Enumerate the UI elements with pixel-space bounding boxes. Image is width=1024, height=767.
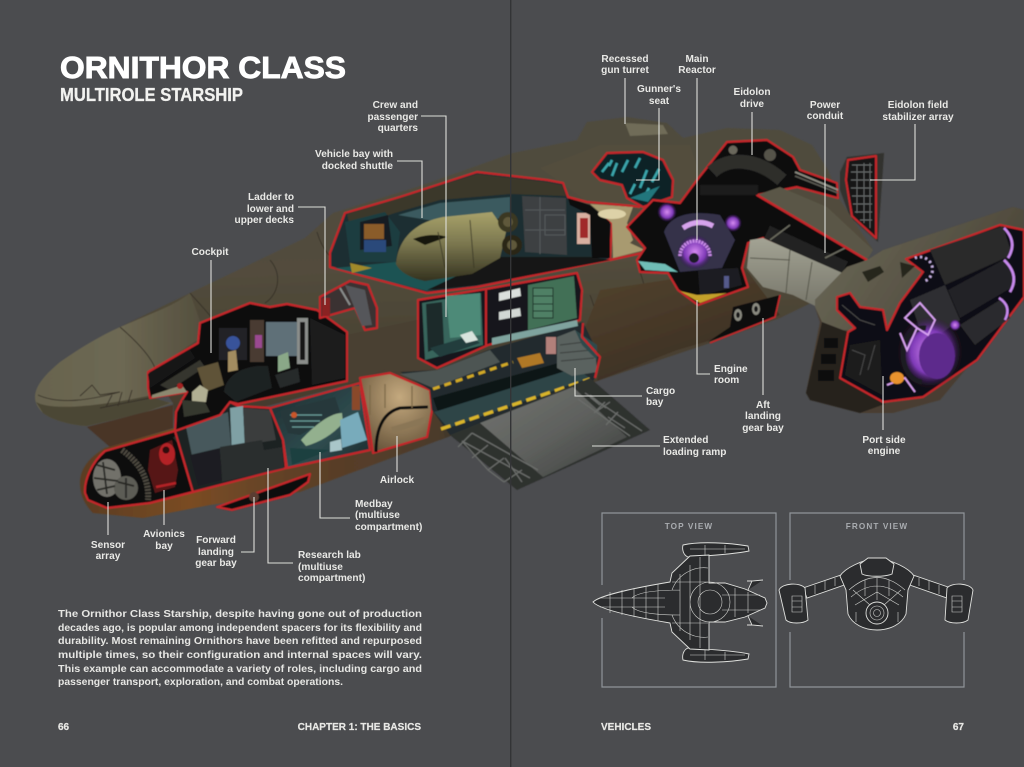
- panel: front view blueprint: [779, 513, 973, 687]
- ring of lights: [915, 257, 933, 281]
- ladder compartment: [320, 281, 377, 330]
- red corridor cut: [568, 197, 640, 207]
- top spine plate: [540, 145, 700, 210]
- label: sensor array: Sensor: [91, 540, 125, 551]
- label: ladder: upper decks: [235, 215, 294, 226]
- neck under nose: [87, 405, 173, 447]
- label: eidolon drive: drive: [740, 99, 764, 110]
- compartment: airlock: [360, 373, 432, 453]
- avionics red unit: [148, 440, 178, 493]
- label: forward landing gear bay: gear bay: [195, 558, 237, 569]
- pale belly stripe: [673, 306, 717, 348]
- label: vehicle bay: Vehicle bay with: [315, 149, 393, 160]
- top view ship drawing: [593, 543, 767, 662]
- label: medbay: (multiuse: [355, 510, 400, 521]
- docked shuttle: [396, 212, 522, 281]
- belly aft: [583, 268, 780, 381]
- heading: TOP VIEW: [665, 522, 713, 531]
- description paragraph: durability. Most remaining Ornithors have been refitted and repurposed: [58, 635, 422, 647]
- front view ship drawing: [779, 558, 973, 630]
- compartment: engine room with main reactor: [627, 140, 867, 305]
- purple engine disc: [898, 316, 962, 388]
- fin dark panel: [806, 322, 885, 413]
- label: cargo bay: bay: [646, 397, 664, 408]
- compartment: medbay: [270, 383, 370, 468]
- label: research lab: Research lab: [298, 550, 361, 561]
- callout labels: [91, 54, 954, 584]
- label: forward landing gear bay: Forward: [196, 535, 236, 546]
- rear floor: [427, 257, 610, 290]
- description paragraph: This example can accommodate a variety of roles, including cargo and: [58, 663, 422, 675]
- cargo bay: [400, 322, 600, 435]
- label: avionics bay: bay: [155, 541, 173, 552]
- label: forward landing gear bay: landing: [198, 547, 234, 558]
- description paragraph: The Ornithor Class Starship, despite having gone out of production: [58, 608, 422, 620]
- heading: FRONT VIEW: [846, 522, 908, 531]
- outer shell: [806, 207, 1024, 413]
- label: engine room: room: [714, 375, 739, 386]
- label: port side engine: Port side: [862, 435, 906, 446]
- label: port side engine: engine: [868, 446, 901, 457]
- compartment: research lab: [175, 402, 286, 492]
- back door panel: [557, 330, 597, 376]
- black floor channel: [433, 362, 575, 412]
- label: avionics bay: Avionics: [143, 529, 185, 540]
- stabilizer fin: [840, 153, 884, 242]
- turret highlight: [625, 123, 668, 136]
- label: ladder: lower and: [247, 204, 294, 215]
- footer: chapter title: CHAPTER 1: THE BASICS: [298, 722, 421, 733]
- label: research lab: (multiuse: [298, 562, 343, 573]
- compartment: vehicle bay: [330, 172, 647, 293]
- panel: top view blueprint: [593, 513, 776, 687]
- center spine fold: [510, 0, 511, 767]
- description paragraph: [58, 608, 422, 688]
- label: main reactor: Main: [686, 54, 708, 65]
- compartment: sensor array: [85, 431, 193, 508]
- wing plate over engine room: [757, 187, 873, 260]
- footer: section title: VEHICLES: [601, 722, 651, 733]
- title block: [60, 50, 346, 105]
- label: vehicle bay: docked shuttle: [322, 161, 393, 172]
- rear floor strip: [400, 350, 500, 388]
- lower pod hull: [80, 382, 445, 518]
- description paragraph: decades ago, is popular among independent spacers for its flexibility and: [58, 622, 422, 634]
- label: crew and passenger quarters: quarters: [378, 123, 418, 134]
- footer: right folio: 67: [953, 722, 964, 733]
- description paragraph: multiple times, so their configuration and internal spaces will vary.: [58, 649, 422, 661]
- power conduit tube: [747, 238, 847, 307]
- label: power conduit: Power: [810, 100, 840, 111]
- label: extended loading ramp: Extended: [663, 435, 708, 446]
- label: aft landing gear bay: landing: [745, 411, 781, 422]
- nose: [35, 293, 205, 426]
- subtitle: MULTIROLE STARSHIP: [60, 85, 243, 105]
- label: gunner's seat: seat: [649, 96, 670, 107]
- port side engine compartment: [837, 225, 1024, 402]
- label: extended loading ramp: loading ramp: [663, 447, 726, 458]
- roof band: [347, 174, 566, 228]
- orange thruster glow: [890, 372, 904, 384]
- label: aft landing gear bay: gear bay: [742, 423, 784, 434]
- compartment: gunner's seat turret: [592, 152, 673, 207]
- orange crate: [517, 353, 544, 368]
- compartment: cockpit: [148, 303, 347, 431]
- engine tubes: [930, 226, 1012, 285]
- bay back wall: [522, 196, 567, 255]
- label: medbay: Medbay: [355, 499, 393, 510]
- frame: [790, 513, 964, 687]
- label: gunner's seat: Gunner's: [637, 84, 681, 95]
- extended loading ramp: [450, 378, 650, 490]
- corridor lit tan: [590, 204, 645, 258]
- label: eidolon field stabilizer array: Eidolon field: [888, 100, 948, 111]
- lit corridor glow: [598, 209, 626, 219]
- label: crew and passenger quarters: passenger: [368, 112, 418, 123]
- label: power conduit: conduit: [807, 111, 844, 122]
- label: medbay: compartment): [355, 522, 422, 533]
- label: crew and passenger quarters: Crew and: [373, 100, 418, 111]
- title: ORNITHOR CLASS: [60, 50, 346, 85]
- teal ledge: [638, 261, 678, 272]
- forward landing gear bay: [217, 474, 310, 510]
- frame: [602, 513, 776, 687]
- label: aft landing gear bay: Aft: [756, 400, 771, 411]
- starship cutaway illustration: [35, 117, 1024, 518]
- label: ladder: Ladder to: [248, 192, 294, 203]
- label: recessed gun turret: Recessed: [601, 54, 649, 65]
- label: eidolon field stabilizer array: stabilizer array: [882, 112, 954, 123]
- wing plate slots: [862, 262, 915, 282]
- hazard stripes: [433, 362, 513, 389]
- label: cargo bay: Cargo: [646, 386, 675, 397]
- main hull upper: [120, 117, 873, 440]
- hull mid brown: [347, 320, 417, 384]
- label: cockpit: Cockpit: [191, 247, 229, 258]
- reactor core: [657, 202, 742, 296]
- compartment: crew and passenger quarters: [418, 273, 582, 368]
- label: airlock: Airlock: [380, 475, 414, 486]
- label: engine room: Engine: [714, 364, 748, 375]
- footer: left folio: 66: [58, 722, 70, 733]
- aft landing gear bay: [708, 295, 780, 343]
- label: main reactor: Reactor: [678, 65, 716, 76]
- wing upper plate: [815, 207, 1024, 332]
- label: sensor array: array: [96, 551, 121, 562]
- hull panel lines: [38, 232, 648, 408]
- label: recessed gun turret: gun turret: [601, 65, 649, 76]
- label: research lab: compartment): [298, 573, 365, 584]
- nose lower band: [36, 396, 170, 426]
- port wing nacelle: [806, 207, 1024, 413]
- description paragraph: passenger transport, exploration, and combat operations.: [58, 676, 343, 688]
- label: eidolon drive: Eidolon: [733, 87, 771, 98]
- leader lines: [108, 78, 915, 563]
- teal floor: [434, 368, 590, 428]
